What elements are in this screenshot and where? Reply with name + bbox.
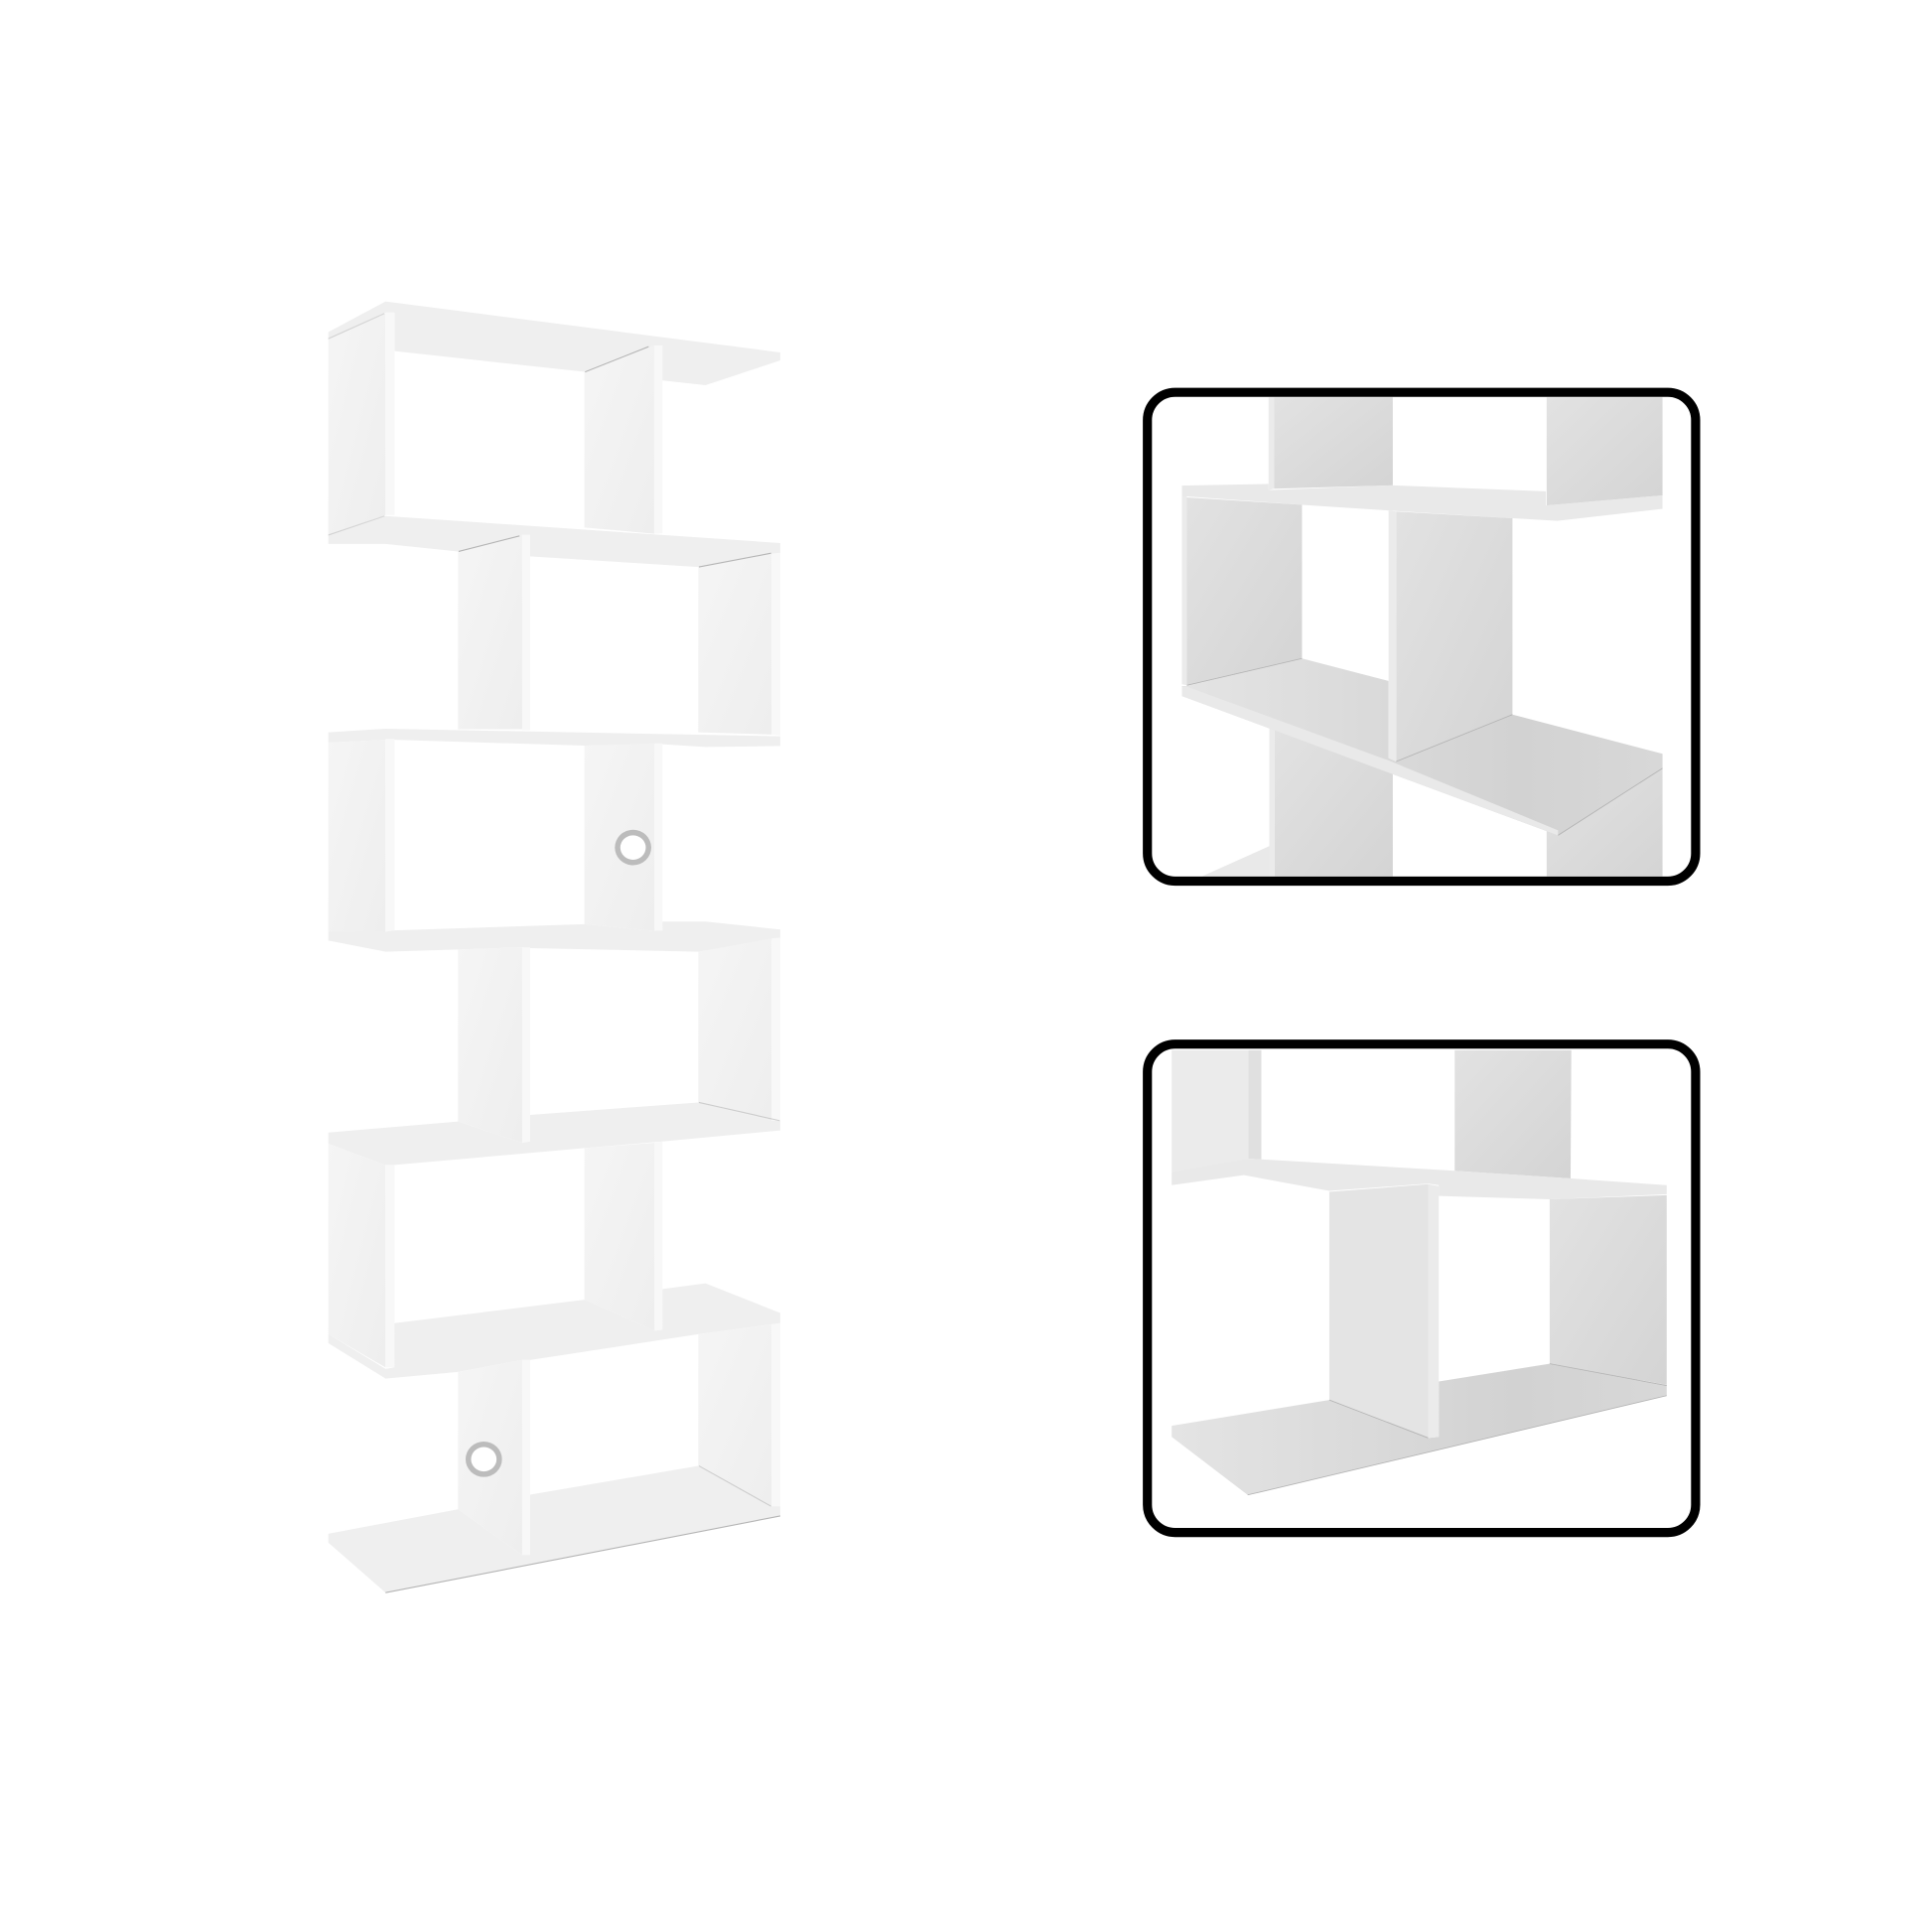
shelf board 2 <box>329 516 780 567</box>
inset 1 top right panel <box>1547 397 1663 505</box>
inset 1 lower divider <box>1270 728 1393 877</box>
inset 1 lower board <box>1182 658 1663 835</box>
inset 1 lower right panel <box>1547 768 1663 877</box>
divider 5 <box>585 1142 662 1330</box>
inset 1 top divider <box>1269 397 1393 490</box>
inset 2 rounded frame <box>1148 1044 1696 1533</box>
lower half of shelf <box>329 937 780 1592</box>
detail inset: base shelf close-up <box>1148 1044 1696 1533</box>
inset 1 rounded frame <box>1148 392 1696 882</box>
inset 1 left panel <box>1182 496 1302 685</box>
divider 4 <box>458 947 530 1143</box>
inset 2 top right panel <box>1454 1050 1572 1178</box>
shelf board 4 <box>329 921 780 952</box>
right panel 4 <box>698 937 780 1121</box>
detail inset: upper shelf close-up <box>1148 392 1696 882</box>
inset 2 top left panel <box>1172 1050 1261 1172</box>
inset 2 centre divider <box>1329 1184 1439 1438</box>
right panel 6 <box>698 1323 780 1506</box>
left panel 3 <box>329 739 394 931</box>
divider 3 with cable hole <box>585 744 662 931</box>
inset 1 upper board <box>1182 483 1663 521</box>
shelf board 1 <box>329 302 780 385</box>
inset 2 right panel <box>1550 1195 1667 1385</box>
inset 1 bottom board fragment <box>1202 846 1270 877</box>
shelf board 3 <box>329 729 780 747</box>
shelf board 5 <box>329 1102 780 1165</box>
right panel 2 <box>698 553 780 736</box>
left panel 1 <box>329 313 394 535</box>
divider 2 <box>458 535 530 730</box>
divider 1 <box>585 345 662 534</box>
shelf board 6 <box>329 1284 780 1379</box>
upper half of shelf <box>329 302 780 952</box>
main shelf: full product view <box>329 302 780 1592</box>
base board <box>329 1466 780 1592</box>
left panel 5 <box>329 1144 394 1367</box>
inset 2 base board <box>1172 1364 1667 1495</box>
inset 2 upper board <box>1172 1159 1667 1199</box>
divider 6 with cable hole <box>458 1360 530 1555</box>
inset 1 centre divider <box>1389 510 1512 761</box>
